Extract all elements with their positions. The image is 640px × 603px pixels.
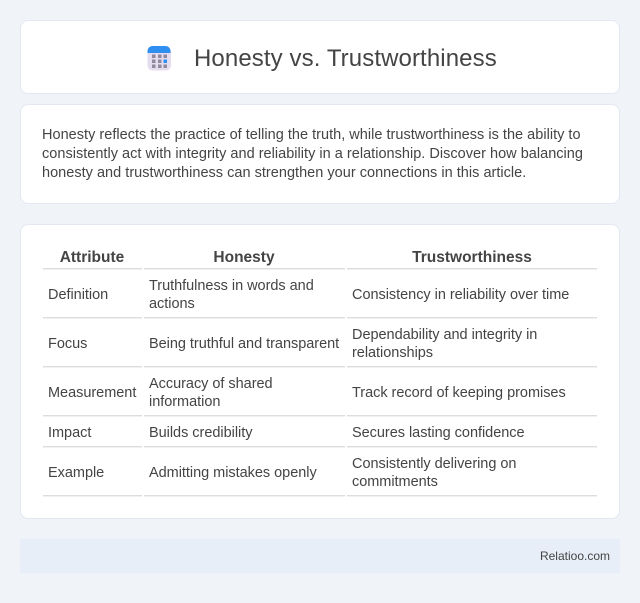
- footer text: Relatioo.com: [540, 549, 610, 563]
- icon: calendar: [148, 46, 171, 70]
- row: definition: actions: [149, 296, 195, 312]
- row: definition: Definition: [48, 287, 108, 303]
- table header: Honesty: [213, 249, 275, 266]
- row: definition: Truthfulness in words and: [149, 278, 314, 294]
- row: focus: [48, 327, 537, 361]
- panel: introduction: [20, 104, 620, 204]
- table header: Trustworthiness: [412, 249, 532, 266]
- table header: Attribute: [60, 249, 124, 266]
- row: focus: Being truthful and transparent: [149, 336, 339, 352]
- row: example: commitments: [352, 474, 438, 490]
- row: impact: Builds credibility: [149, 425, 252, 441]
- text block: introduction: [42, 127, 583, 181]
- row: definition: [48, 278, 569, 312]
- row: impact: Secures lasting confidence: [352, 425, 525, 441]
- footer bar: [20, 539, 620, 573]
- text block: introduction: consistently act with integrity and reliability in a relationship. Discover how balancing: [42, 146, 583, 162]
- row: focus: Dependability and integrity in: [352, 327, 537, 343]
- row: impact: [48, 425, 525, 441]
- table header: [60, 249, 532, 266]
- title: Honesty vs. Trustworthiness: [194, 45, 497, 72]
- row: example: Example: [48, 465, 104, 481]
- panel: comparison table: [20, 224, 620, 519]
- row: focus: Focus: [48, 336, 87, 352]
- row: example: Admitting mistakes openly: [149, 465, 317, 481]
- text block: introduction: honesty and trustworthiness can strengthen your connections in this article.: [42, 165, 526, 181]
- row: impact: Impact: [48, 425, 91, 441]
- row: measurement: Accuracy of shared: [149, 376, 273, 392]
- row: measurement: Track record of keeping promises: [352, 385, 566, 401]
- row: focus: relationships: [352, 345, 433, 361]
- row: measurement: Measurement: [48, 385, 136, 401]
- panel: title card: [20, 20, 620, 94]
- row: example: [48, 456, 516, 490]
- row: definition: Consistency in reliability over time: [352, 287, 569, 303]
- row: example: Consistently delivering on: [352, 456, 516, 472]
- row: measurement: [48, 376, 566, 410]
- text block: introduction: Honesty reflects the practice of telling the truth, while trustworthiness is the ability to: [42, 127, 581, 143]
- row: measurement: information: [149, 394, 220, 410]
